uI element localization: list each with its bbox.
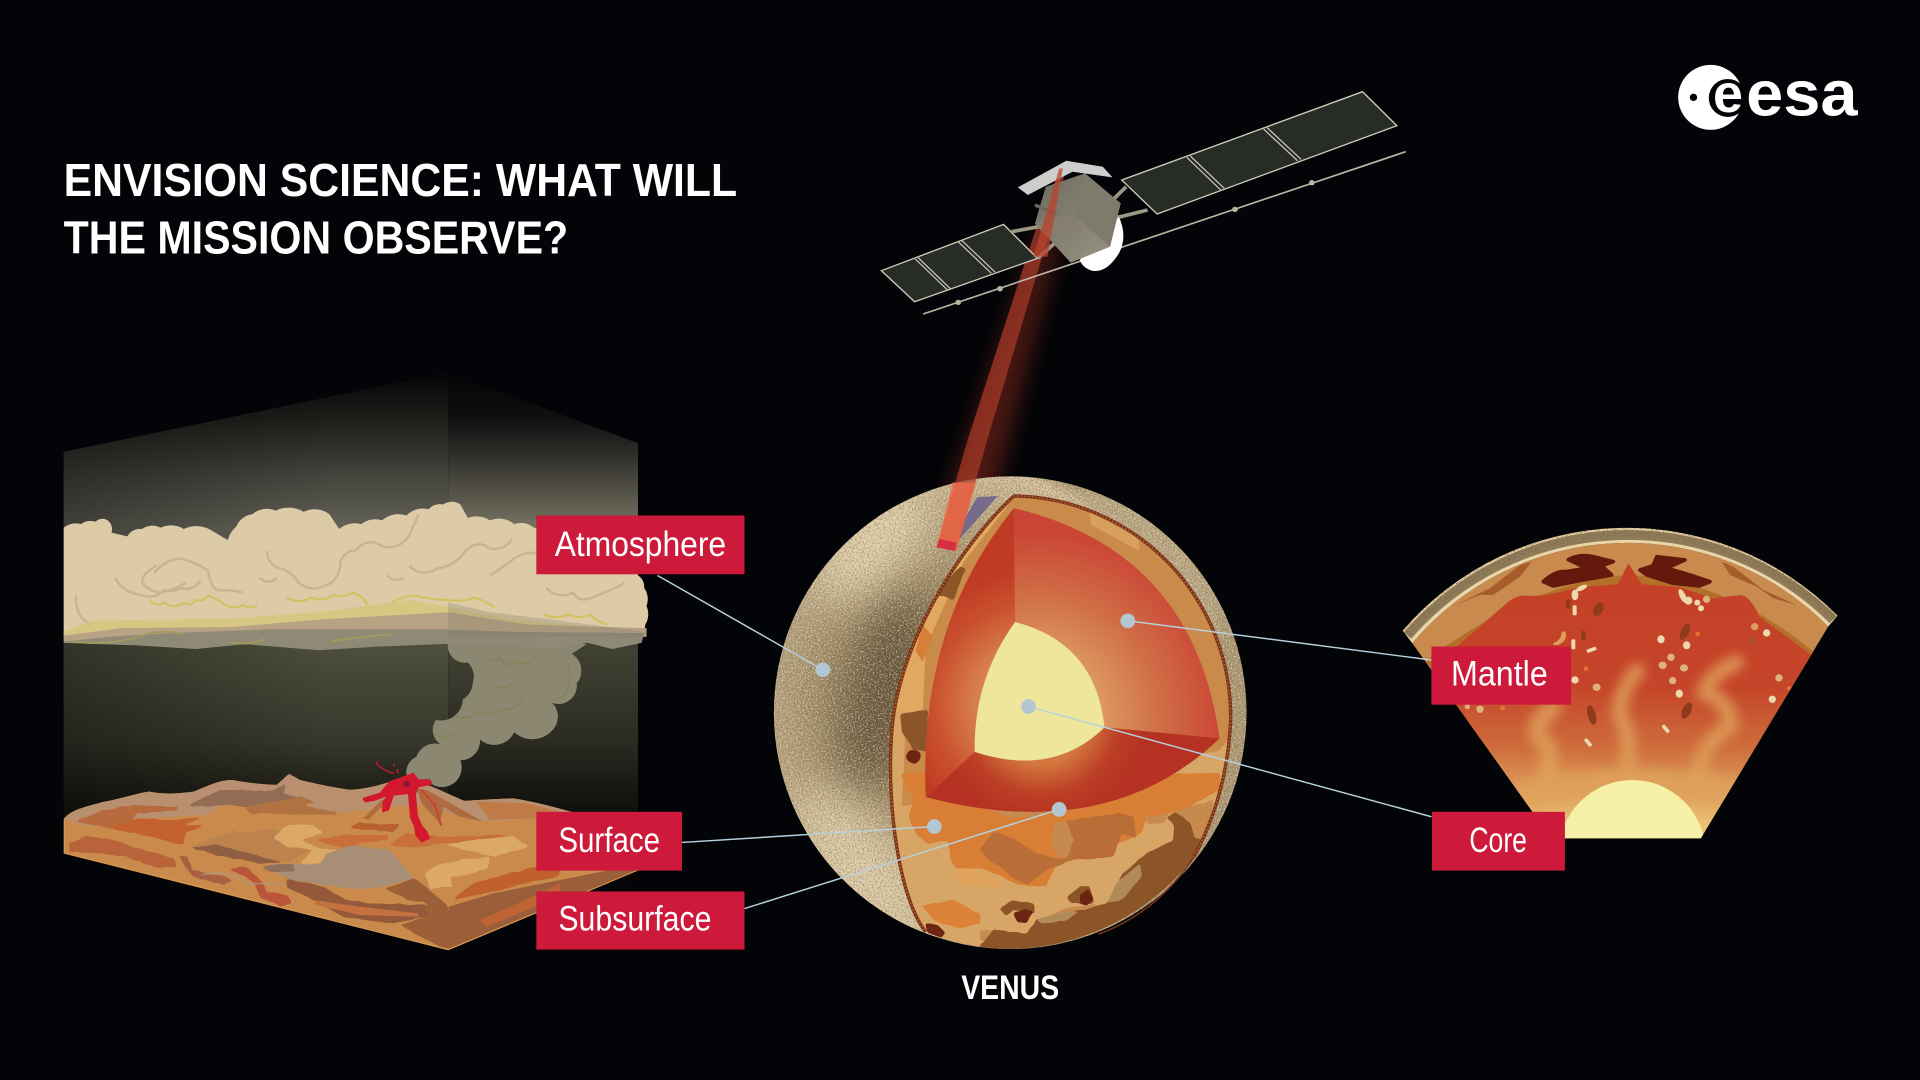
label: Mantle [1431,647,1571,705]
atmosphere outer shell [774,459,1249,949]
connector lines [658,576,1431,909]
mantle specks [1465,583,1783,747]
title [64,154,737,263]
convection plumes [1531,662,1739,796]
spacecraft [881,92,1406,314]
array arms [1012,187,1147,258]
section: mantle detail fan [1402,528,1838,838]
core wedge [975,622,1104,761]
planet: Venus cutaway [774,459,1249,960]
surface cross-section [892,498,1229,949]
satellite beam glow [931,233,1060,551]
solar array: right [1122,92,1397,214]
beam on atmosphere shadow [959,496,998,539]
label: Subsurface: Subsurface [558,899,711,939]
title: ENVISION SCIENCE: WHAT WILL [64,154,737,206]
logo: esa: e [1713,64,1743,124]
label: Venus: VENUS [961,969,1059,1007]
cloud base bands [64,600,647,650]
mantle wedge [925,508,1220,812]
label: Surface: Surface [558,820,660,860]
label: Core: Core [1469,820,1527,860]
volcanic plume [406,637,587,787]
marker dots [816,613,1135,834]
ground block [64,774,638,950]
title: THE MISSION OBSERVE? [64,211,568,263]
top reflector [1018,161,1112,195]
beam over body [1033,168,1063,257]
label: Core [1432,812,1565,871]
label: Surface [536,812,682,871]
volcano with lava [363,762,483,842]
label: Subsurface [536,891,744,950]
satellite beam [937,168,1067,551]
body [1035,173,1121,263]
boom [923,152,1406,314]
antenna dish [1080,217,1123,271]
atmosphere backdrop [64,372,638,882]
mantle [1426,576,1814,838]
label: Atmosphere: Atmosphere [555,524,726,564]
label: Atmosphere [536,516,744,574]
logo: esa [1678,59,1858,130]
outer core [1564,780,1704,838]
crust band [1403,528,1838,643]
dark blobs [1543,556,1710,586]
crust shadow patches [1455,562,1797,605]
cloud deck [64,502,648,650]
panel: atmosphere and surface column [60,372,660,955]
logo: esa: esa [1746,59,1858,130]
crust ring [890,496,1231,934]
solar array: left [881,224,1037,302]
label: Mantle: Mantle [1451,654,1548,694]
